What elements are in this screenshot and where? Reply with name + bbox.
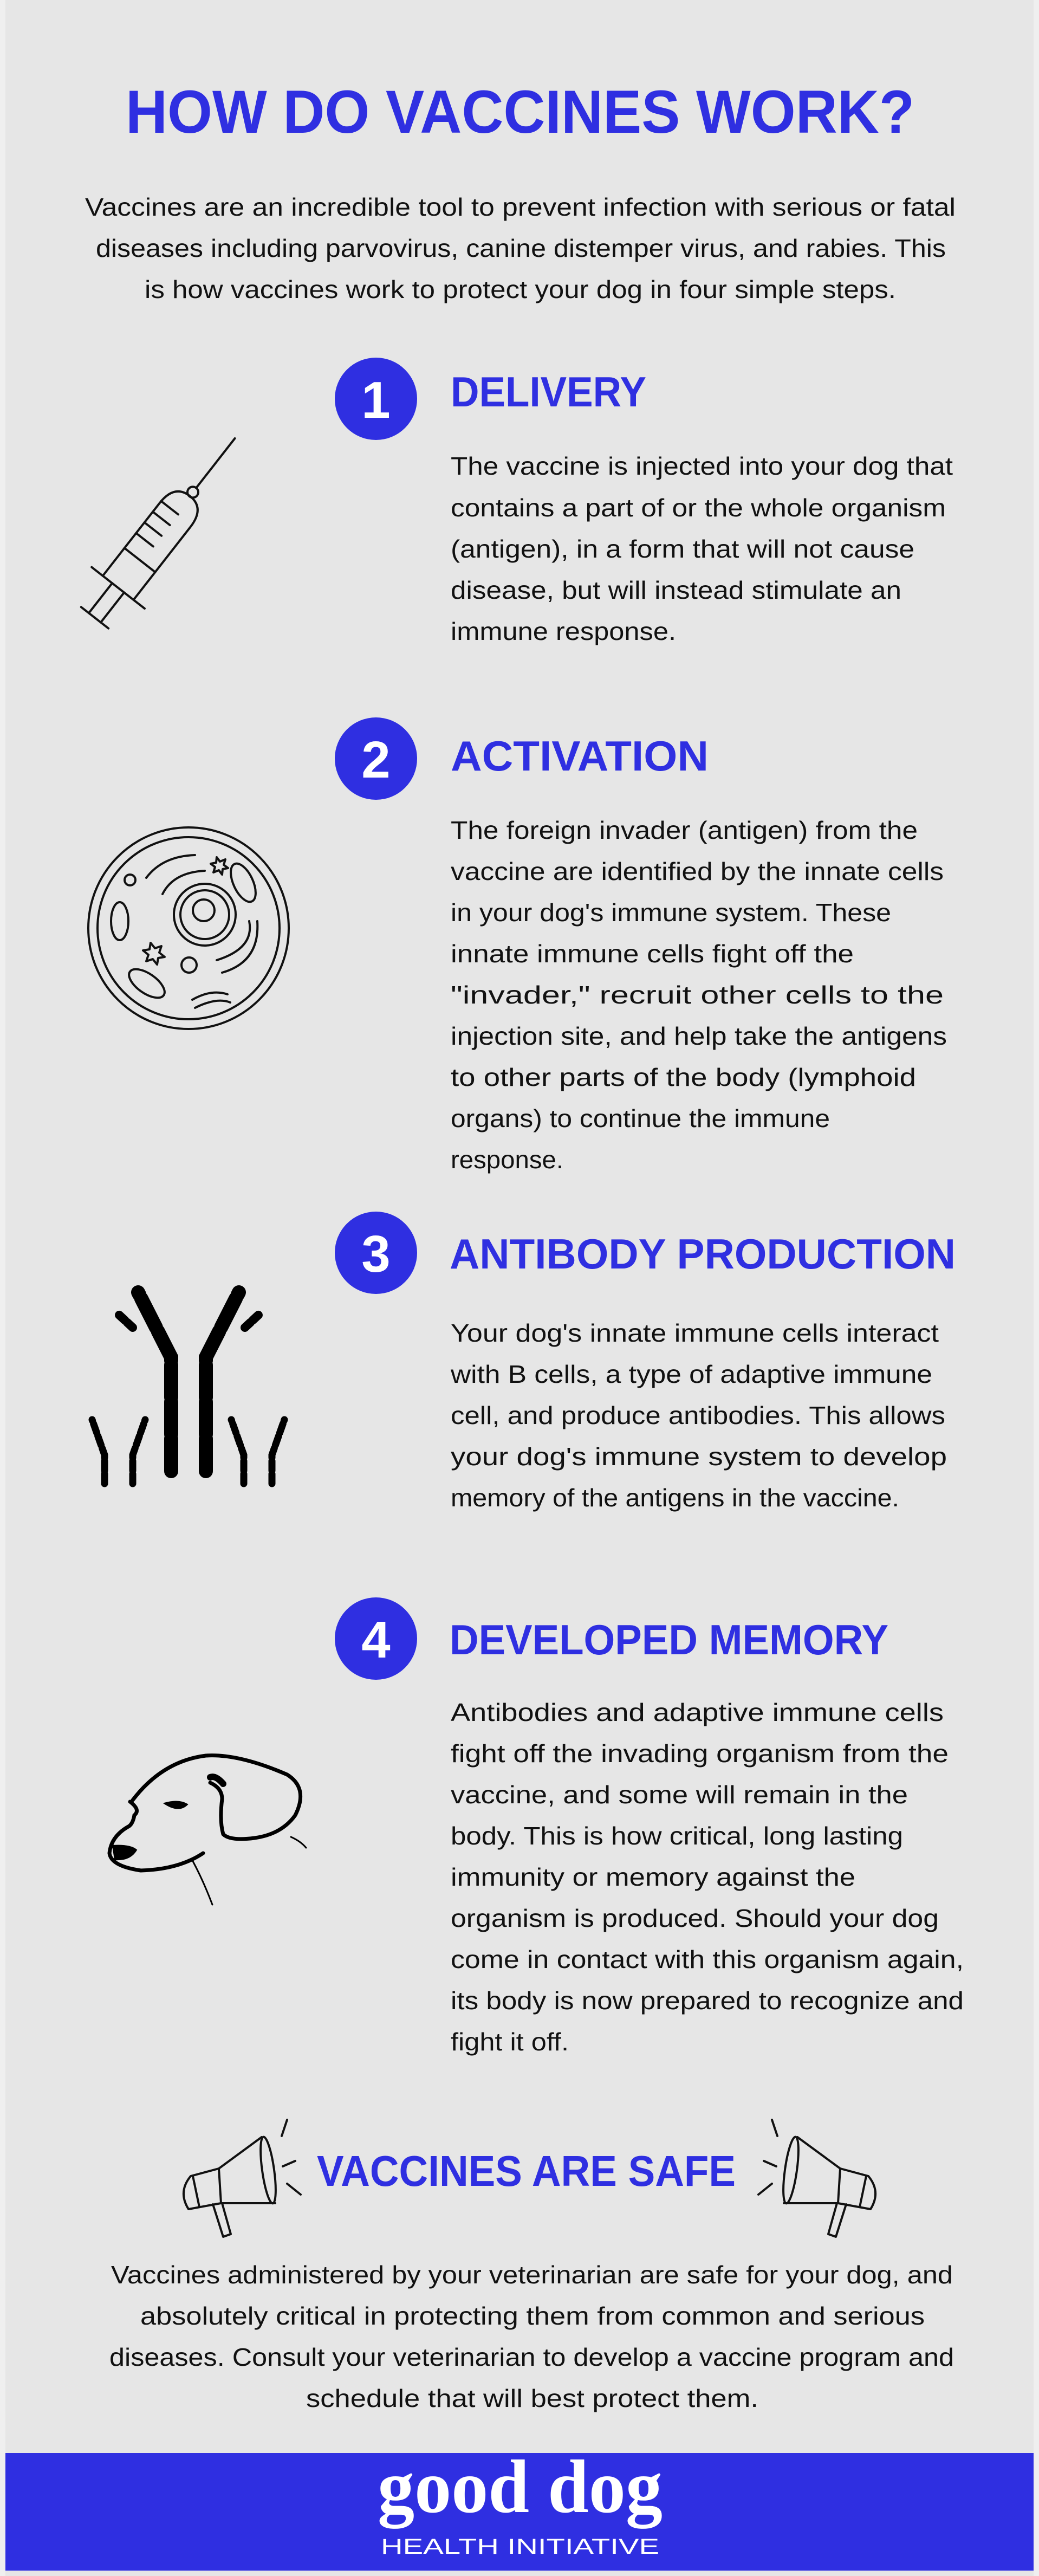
step 1 body: contains a part of or the whole organism xyxy=(451,494,946,522)
step 3 body: with B cells, a type of adaptive immune xyxy=(450,1360,932,1388)
step 4 body: organism is produced. Should your dog xyxy=(451,1904,939,1932)
step 2 body: innate immune cells fight off the xyxy=(451,940,854,968)
safety text: diseases. Consult your veterinarian to develop a vaccine program and xyxy=(109,2343,954,2371)
step 4 body: fight it off. xyxy=(451,2028,569,2056)
step 1 body: (antigen), in a form that will not cause xyxy=(451,535,914,563)
icon: megaphone left xyxy=(184,2120,301,2237)
title: HOW DO VACCINES WORK? xyxy=(126,78,914,146)
heading: vaccines are safe: VACCINES ARE SAFE xyxy=(317,2147,736,2195)
step 3 number badge xyxy=(335,1212,417,1294)
step 4 body: body. This is how critical, long lasting xyxy=(451,1822,903,1850)
step 2 number badge: 2 xyxy=(361,731,391,789)
step 2 body: vaccine are identified by the innate cells xyxy=(451,857,944,885)
logo subtitle: HEALTH INITIATIVE xyxy=(381,2535,659,2559)
step 2 number badge xyxy=(335,717,417,800)
step 1 body: immune response. xyxy=(451,617,676,645)
icon: megaphone right xyxy=(758,2120,875,2237)
step 3 body: memory of the antigens in the vaccine. xyxy=(451,1484,899,1512)
safety text: absolutely critical in protecting them from common and serious xyxy=(140,2302,925,2330)
step 1 body xyxy=(451,452,953,645)
icon: antibodies xyxy=(92,1292,284,1484)
step 3 heading: ANTIBODY PRODUCTION xyxy=(450,1230,956,1278)
safety text: Vaccines administered by your veterinarian are safe for your dog, and xyxy=(111,2261,953,2289)
intro text: is how vaccines work to protect your dog in four simple steps. xyxy=(145,275,896,303)
intro text: diseases including parvovirus, canine distemper virus, and rabies. This xyxy=(96,234,946,262)
step 2 body: injection site, and help take the antigens xyxy=(451,1022,947,1050)
step 1 body: disease, but will instead stimulate an xyxy=(451,576,901,604)
step 3 body: Your dog's innate immune cells interact xyxy=(451,1319,939,1347)
step 1 heading: DELIVERY xyxy=(451,368,646,416)
step 3 body xyxy=(450,1319,947,1512)
step 3 body: cell, and produce antibodies. This allows xyxy=(451,1401,945,1429)
step 3 body: your dog's immune system to develop xyxy=(451,1442,947,1471)
step 4 body: come in contact with this organism again, xyxy=(451,1945,964,1973)
step 2 body: in your dog's immune system. These xyxy=(451,898,891,927)
step 1 number badge xyxy=(335,358,417,440)
step 4 body: immunity or memory against the xyxy=(451,1863,855,1891)
safety text: schedule that will best protect them. xyxy=(306,2384,758,2412)
safety heading with megaphones xyxy=(184,2120,875,2237)
step 4 heading: DEVELOPED MEMORY xyxy=(450,1616,888,1664)
step 2 body: "invader," recruit other cells to the xyxy=(451,981,944,1009)
footer band xyxy=(5,2445,1034,2571)
step 4 body: Antibodies and adaptive immune cells xyxy=(451,1698,944,1726)
step 2 body: The foreign invader (antigen) from the xyxy=(451,816,918,844)
step 4 body: its body is now prepared to recognize and xyxy=(451,1986,964,2015)
step 4 body: vaccine, and some will remain in the xyxy=(451,1781,908,1809)
icon: dog head xyxy=(109,1756,306,1905)
logo: good dog: good dog xyxy=(378,2445,663,2529)
safety text xyxy=(109,2261,954,2412)
intro text: Vaccines are an incredible tool to prevent infection with serious or fatal xyxy=(85,193,956,221)
step 2 body xyxy=(451,816,947,1174)
intro text xyxy=(85,193,956,303)
icon: syringe xyxy=(68,418,261,638)
step 2 body: organs) to continue the immune xyxy=(451,1104,830,1132)
step 2 body: response. xyxy=(451,1145,563,1174)
step 4 number badge xyxy=(335,1597,417,1680)
step 4 number badge: 4 xyxy=(361,1611,391,1669)
icon: cell xyxy=(88,827,289,1029)
step 4 body xyxy=(451,1698,964,2056)
step 1 body: The vaccine is injected into your dog that xyxy=(451,452,953,480)
step 2 body: to other parts of the body (lymphoid xyxy=(451,1063,916,1091)
step 1 number badge: 1 xyxy=(361,371,391,429)
step 4 body: fight off the invading organism from the xyxy=(451,1739,949,1768)
step 3 number badge: 3 xyxy=(361,1225,391,1283)
step 2 heading: ACTIVATION xyxy=(451,732,709,780)
